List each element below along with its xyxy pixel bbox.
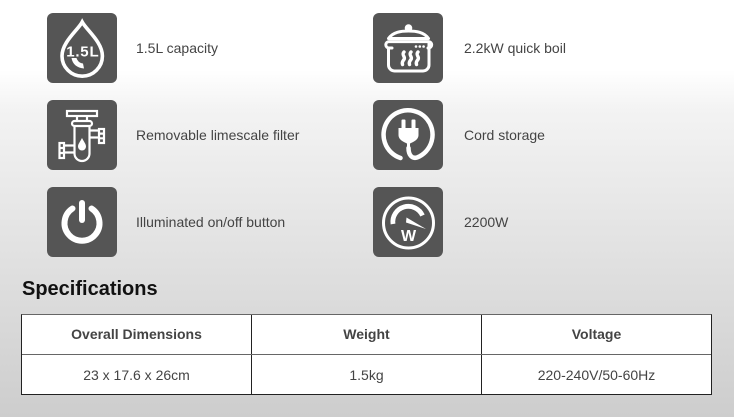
icon: water drop 1.5L capacity: [47, 13, 117, 83]
wattage label: 2200W: [464, 214, 508, 230]
cord storage label: Cord storage: [464, 127, 545, 143]
header: Weight: Weight: [343, 326, 390, 342]
header: Voltage: Voltage: [572, 326, 621, 342]
icon: water drop 1.5L capacity: 1.5L: [66, 44, 99, 60]
quick boil label: 2.2kW quick boil: [464, 40, 566, 56]
value: dimensions: 23 x 17.6 x 26cm: [83, 367, 190, 383]
icon: wattage gauge: W: [401, 228, 417, 245]
value: weight: 1.5kg: [349, 367, 384, 383]
value: voltage: 220-240V/50-60Hz: [538, 367, 655, 383]
specifications table: [21, 314, 712, 395]
icon: limescale filter: [47, 100, 117, 170]
header: Overall Dimensions: Overall Dimensions: [71, 326, 202, 342]
filter label: Removable limescale filter: [136, 127, 299, 143]
icon: wattage gauge: [373, 187, 443, 257]
icon: plug cord storage: [373, 100, 443, 170]
icon: cooking pot: [373, 13, 443, 83]
on/off label: Illuminated on/off button: [136, 214, 285, 230]
heading: Specifications: Specifications: [22, 278, 158, 300]
capacity label: 1.5L capacity: [136, 40, 218, 56]
icon: power button: [47, 187, 117, 257]
